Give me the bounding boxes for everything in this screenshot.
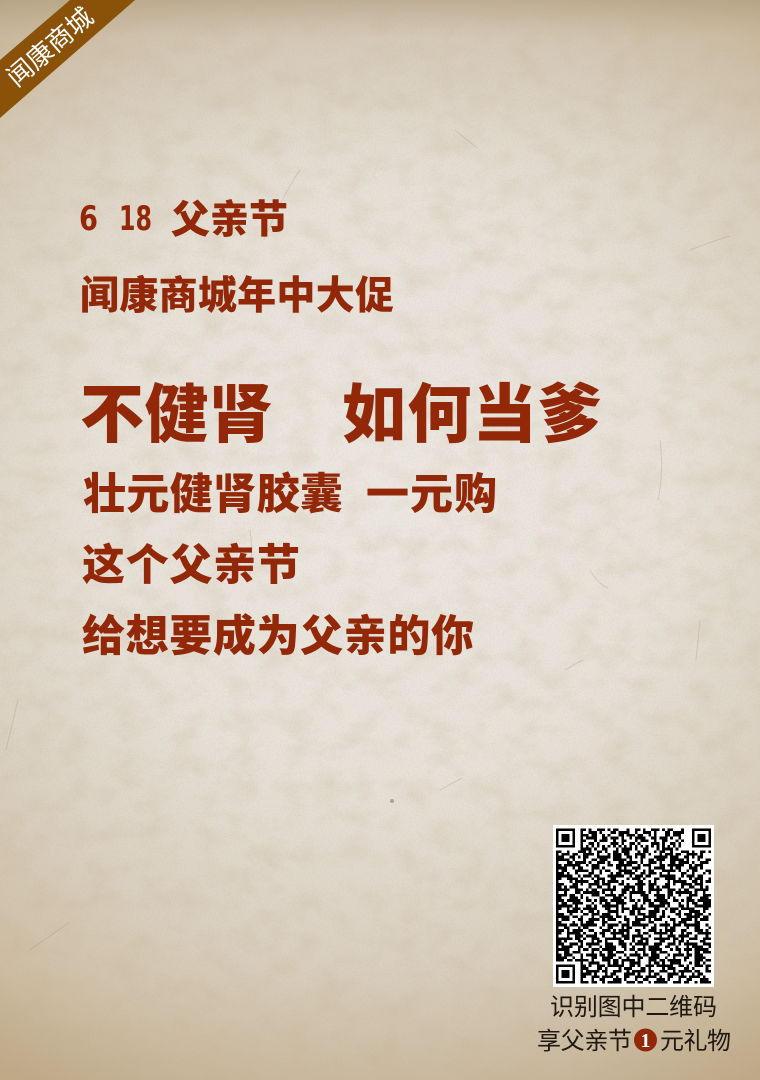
finder and alignment marks bbox=[556, 828, 711, 984]
offer line: 壮元健肾胶囊 一元购 bbox=[83, 471, 497, 519]
heading: 6 18 父亲节 bbox=[79, 199, 288, 242]
headline: 不健肾 如何当爹: 如何当爹 bbox=[342, 379, 602, 451]
QR code bbox=[553, 825, 714, 987]
headline: 不健肾 如何当爹 bbox=[80, 379, 602, 451]
caption: 享父亲节 1 元礼物: 1 bbox=[640, 1030, 650, 1052]
caption: 识别图中二维码: 识别图中二维码 bbox=[550, 994, 717, 1021]
heading: 闻康商城年中大促: 闻康商城年中大促 bbox=[80, 275, 394, 318]
offer line: 壮元健肾胶囊 一元购: 一元购 bbox=[366, 471, 497, 519]
offer line: 壮元健肾胶囊 一元购: 壮元健肾胶囊 bbox=[83, 471, 343, 519]
headline: 不健肾 如何当爹: 不健肾 bbox=[80, 379, 273, 451]
text line: 给想要成为父亲的你: 给想要成为父亲的你 bbox=[82, 612, 474, 661]
heading: 6 18 父亲节: 父亲节 bbox=[171, 199, 288, 242]
caption: 享父亲节 1 元礼物 bbox=[537, 1028, 731, 1055]
text line: 这个父亲节: 这个父亲节 bbox=[82, 542, 300, 590]
heading: 6 18 父亲节: 6 bbox=[79, 199, 98, 239]
corner ribbon: 闻康商城: 闻康商城 bbox=[1, 2, 99, 92]
heading: 6 18 父亲节: 18 bbox=[119, 199, 152, 239]
caption: 享父亲节 1 元礼物: 享父亲节 bbox=[537, 1028, 632, 1055]
caption: 享父亲节 1 元礼物: 元礼物 bbox=[660, 1028, 731, 1055]
corner ribbon: 闻康商城 bbox=[0, 0, 135, 118]
